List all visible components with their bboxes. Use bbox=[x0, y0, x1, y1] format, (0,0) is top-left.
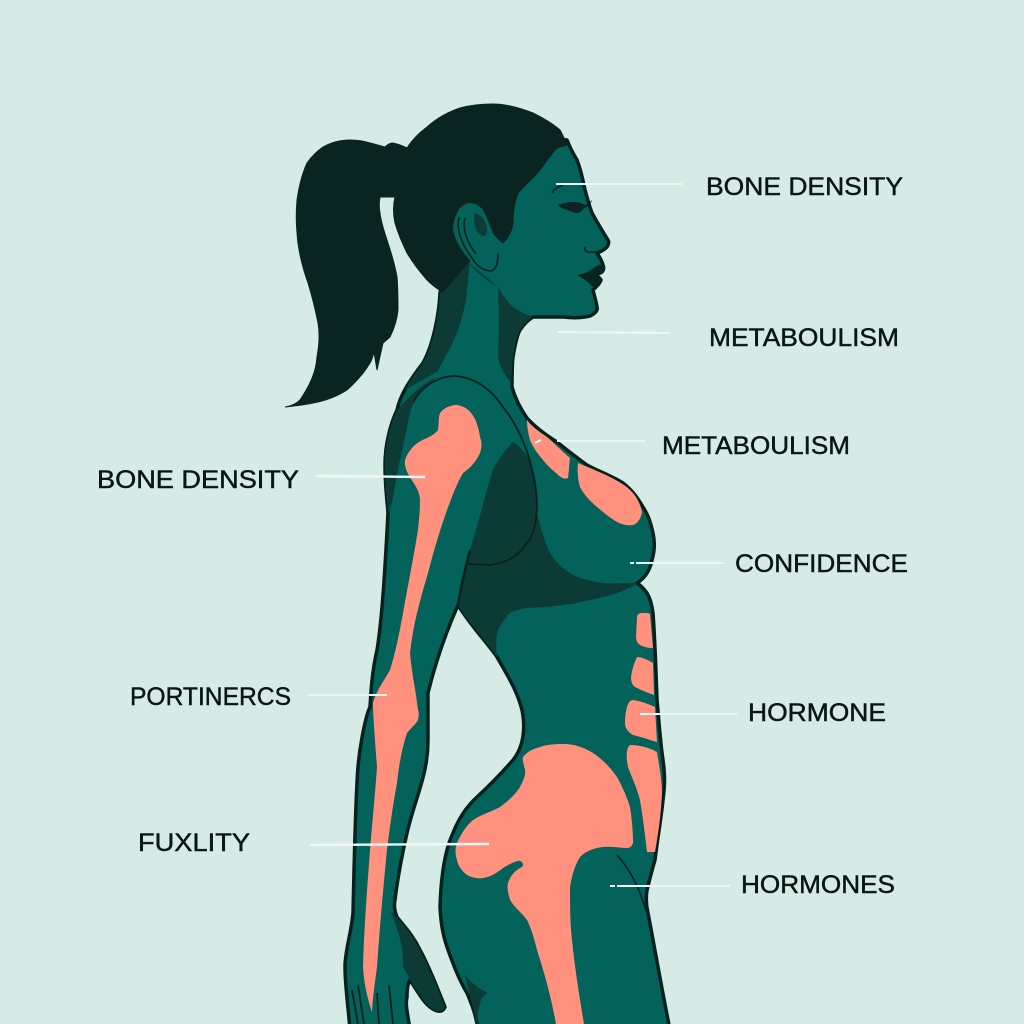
rib segment one bbox=[636, 613, 653, 648]
label: metaboulism lower bbox=[535, 432, 850, 460]
label: metaboulism upper: METABOULISM bbox=[709, 324, 899, 352]
ponytail and hair bbox=[285, 104, 567, 407]
label: fuxlity: FUXLITY bbox=[138, 829, 250, 857]
torso shadow bbox=[458, 442, 637, 657]
label: portinercs: PORTINERCS bbox=[130, 683, 291, 711]
thigh contour line bbox=[617, 855, 647, 913]
hip side bone bbox=[627, 745, 662, 852]
arm front edge line bbox=[458, 550, 470, 605]
hand shadow bbox=[391, 912, 445, 1011]
collarbone bone bbox=[527, 420, 570, 479]
lips bbox=[577, 265, 604, 287]
chest bone bbox=[578, 463, 642, 525]
ear bbox=[453, 203, 499, 271]
label: confidence: CONFIDENCE bbox=[735, 550, 908, 578]
neck shadow back bbox=[405, 260, 470, 390]
shoulder contour line bbox=[413, 376, 537, 565]
finger lines bbox=[352, 985, 393, 1024]
label: hormone: HORMONE bbox=[748, 699, 886, 727]
eye bbox=[558, 200, 592, 213]
label: bone density top right: BONE DENSITY bbox=[706, 173, 903, 201]
pelvis and femur bbox=[456, 744, 633, 1024]
figure: female body in profile bbox=[285, 104, 670, 1024]
arm back shadow bbox=[385, 377, 437, 513]
label: hormones: HORMONES bbox=[741, 871, 895, 899]
arm bone bbox=[363, 405, 482, 1012]
brow and nose lines bbox=[552, 185, 597, 252]
rib segment two bbox=[631, 657, 654, 695]
label: metaboulism lower: METABOULISM bbox=[662, 432, 850, 460]
knee shadow bbox=[465, 975, 488, 1024]
body silhouette bbox=[345, 130, 670, 1024]
label: bone density left: BONE DENSITY bbox=[97, 466, 299, 494]
neck shadow front bbox=[468, 262, 533, 383]
rib segment three bbox=[625, 700, 657, 742]
